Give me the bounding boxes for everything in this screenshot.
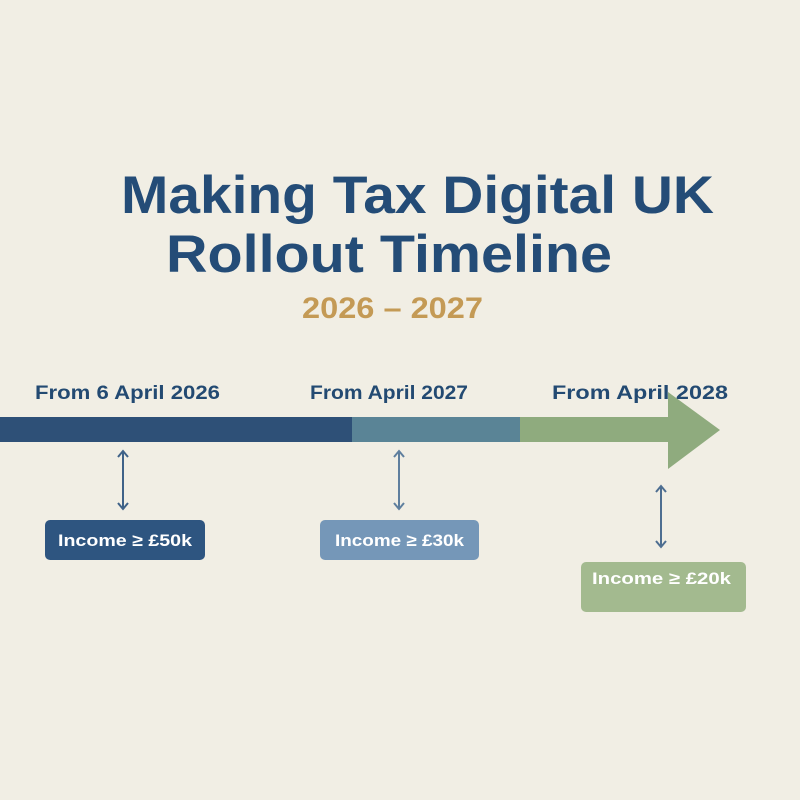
- timeline arrow: [0, 392, 720, 469]
- title: [121, 166, 714, 284]
- date labels: From 6 April 2026: [35, 383, 220, 404]
- date labels: From April 2028: [552, 383, 728, 404]
- date labels: From April 2027: [310, 383, 468, 404]
- title: Making Tax Digital UK: [121, 166, 714, 225]
- income boxes: [45, 520, 746, 612]
- date labels: [35, 383, 728, 404]
- income boxes: Income ≥ £20k: [592, 569, 732, 588]
- income boxes: Income ≥ £50k: [58, 531, 193, 550]
- income boxes: Income ≥ £30k: [335, 531, 465, 550]
- subtitle: years: 2026 – 2027: [302, 292, 483, 325]
- connector arrows: [118, 451, 666, 547]
- title: Rollout Timeline: [166, 225, 612, 284]
